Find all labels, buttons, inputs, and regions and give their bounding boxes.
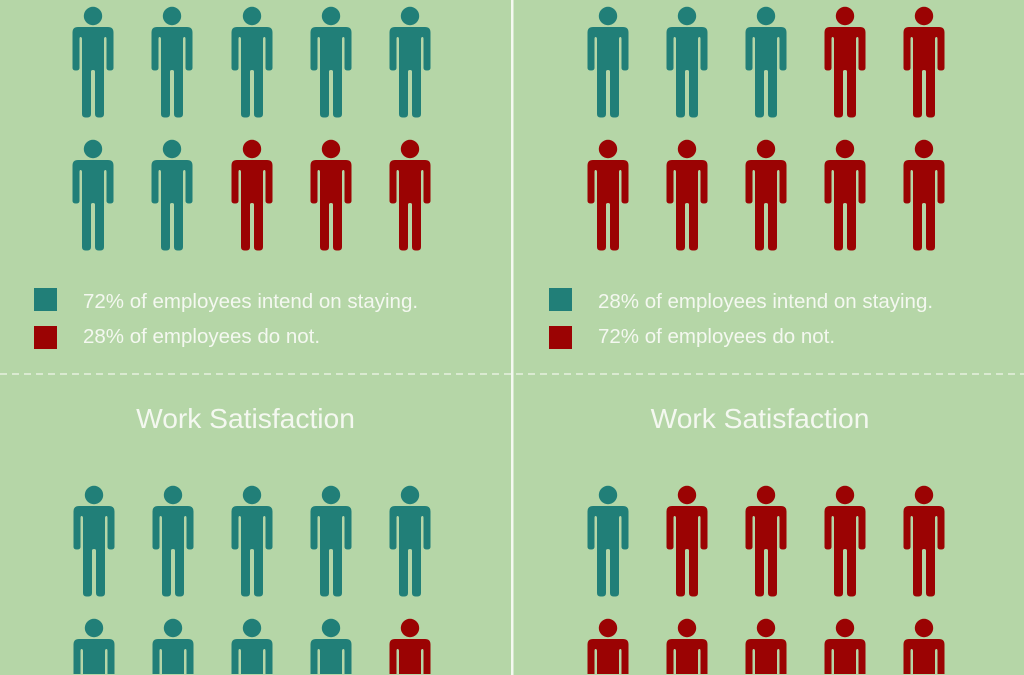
dashed divider (0, 373, 1024, 375)
panel: top left (34, 7, 430, 349)
legend: not staying: 72% of employees do not. (598, 325, 835, 348)
panel: bottom right (588, 402, 944, 674)
pictogram: 72 percent staying (72, 7, 430, 250)
legend: staying: 28% of employees intend on staying. (598, 290, 933, 313)
panel: top right (549, 7, 944, 349)
panel: bottom left (74, 402, 430, 674)
pictogram: work satisfaction right (588, 486, 944, 674)
vertical divider (511, 0, 514, 675)
legend: not staying: 28% of employees do not. (83, 325, 320, 348)
heading: Work Satisfaction (136, 402, 355, 434)
pictogram: work satisfaction left (74, 486, 430, 674)
heading: Work Satisfaction (651, 402, 869, 434)
legend: staying: 72% of employees intend on staying. (83, 290, 418, 313)
pictogram: 28 percent staying (588, 7, 944, 250)
